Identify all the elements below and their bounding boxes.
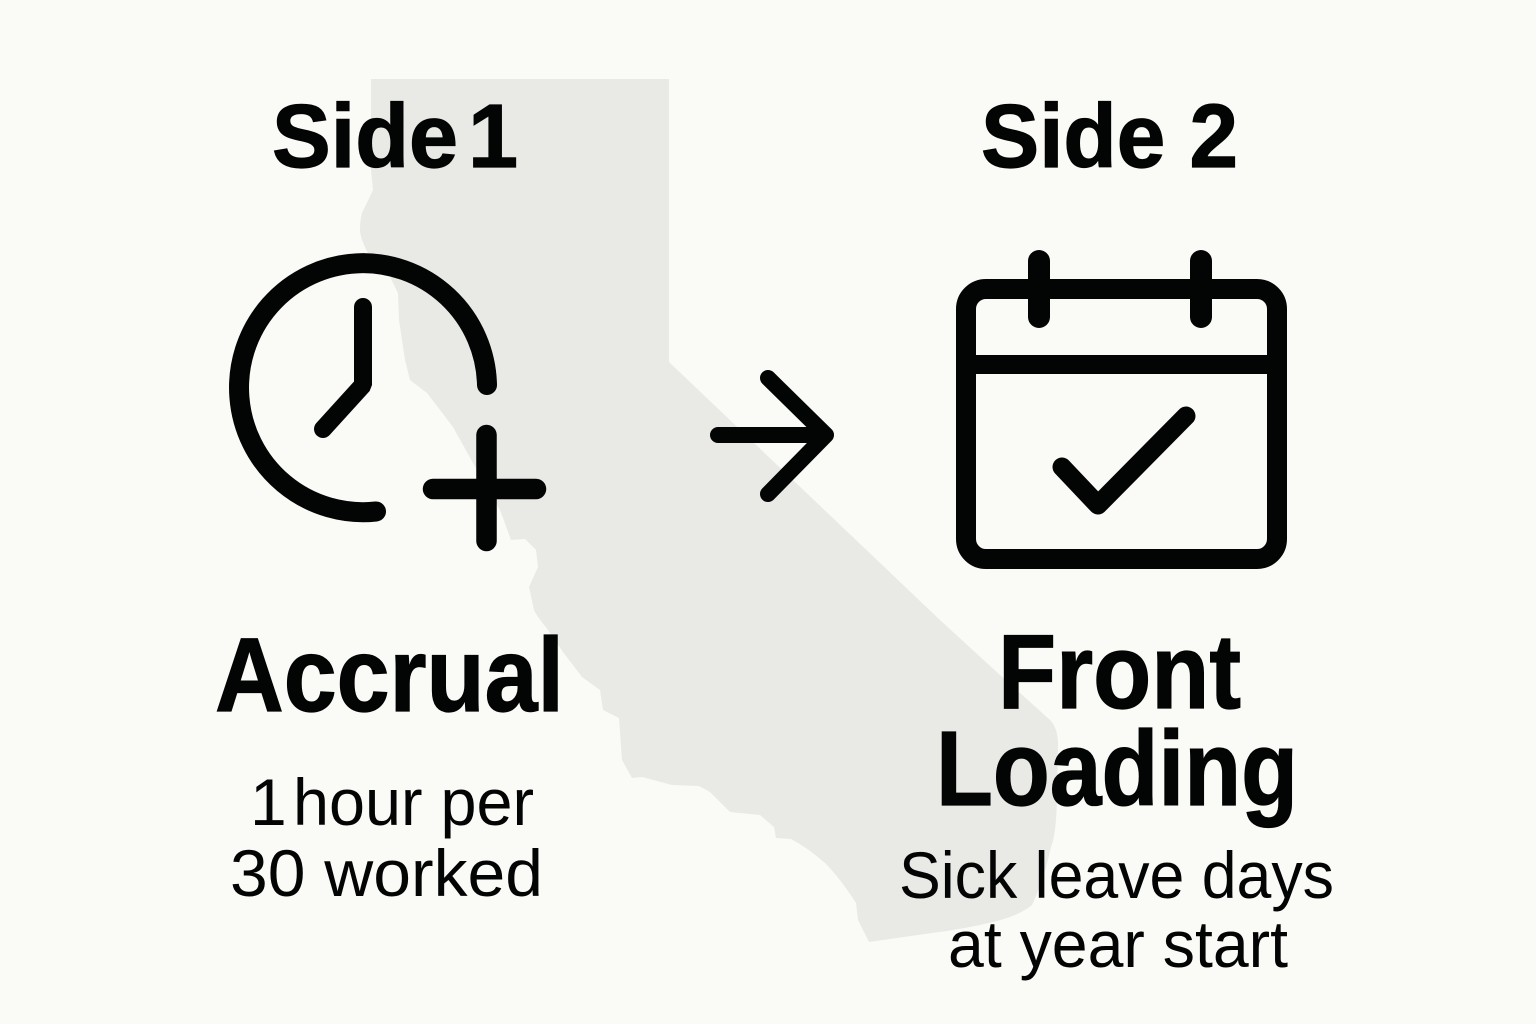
description: accrual rate: 30 worked xyxy=(230,836,543,910)
description: front loading: Sick leave days xyxy=(899,838,1334,912)
description: front loading: at year start xyxy=(948,907,1288,981)
description: front loading xyxy=(899,838,1334,981)
panel: side 2 front loading xyxy=(899,87,1334,981)
panel: side 1 accrual xyxy=(215,87,564,910)
arrow: side 1 to side 2 xyxy=(718,378,826,494)
title: Front Loading: Loading xyxy=(936,710,1298,828)
heading: Side 2: Side 2 xyxy=(981,87,1238,187)
title: Accrual: Accrual xyxy=(215,617,564,734)
heading: Side 1: 1 xyxy=(468,87,518,187)
title: Front Loading: Front xyxy=(998,613,1241,731)
icon: clock with plus xyxy=(239,263,536,541)
title: Front Loading xyxy=(936,613,1298,828)
background: California silhouette xyxy=(360,79,1058,942)
description: accrual rate: 1 xyxy=(250,765,287,839)
icon: calendar with check xyxy=(966,261,1277,559)
description: accrual rate: hour per xyxy=(293,765,534,839)
description: accrual rate xyxy=(230,765,543,910)
heading: Side 1: Side xyxy=(272,87,458,187)
